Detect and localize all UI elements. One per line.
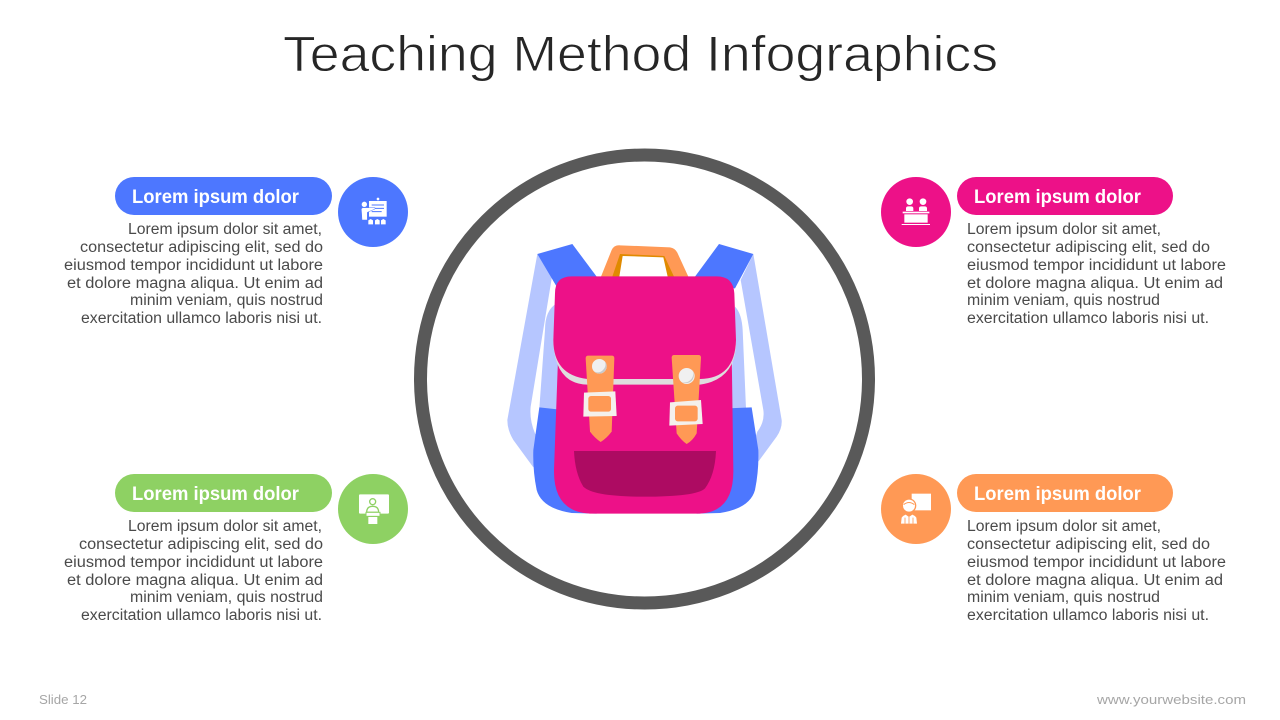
heading pill: pink: Lorem ipsum dolor bbox=[974, 186, 1141, 208]
body text: Lorem ipsum dolor sit amet, bbox=[128, 518, 322, 535]
heading pill: green bbox=[115, 474, 332, 512]
heading pill: pink bbox=[957, 177, 1173, 215]
heading pill: orange bbox=[957, 474, 1173, 512]
body text: et dolore magna aliqua. Ut enim ad bbox=[67, 275, 323, 292]
body text: eiusmod tempor incididunt ut labore bbox=[64, 257, 323, 274]
central ring bbox=[420, 155, 868, 603]
body text: Lorem ipsum dolor sit amet, bbox=[967, 518, 1161, 535]
icon: two people at desk bbox=[881, 177, 951, 247]
body text: exercitation ullamco laboris nisi ut. bbox=[967, 607, 1209, 624]
heading pill: green: Lorem ipsum dolor bbox=[132, 483, 299, 505]
body text: consectetur adipiscing elit, sed do bbox=[967, 239, 1210, 256]
body text bbox=[64, 518, 323, 624]
title: Teaching Method Infographics bbox=[283, 26, 998, 82]
body text: minim veniam, quis nostrud bbox=[130, 589, 323, 606]
body text: consectetur adipiscing elit, sed do bbox=[80, 239, 323, 256]
body text: Lorem ipsum dolor sit amet, bbox=[967, 221, 1161, 238]
panel: top right bbox=[881, 177, 1226, 327]
body text: eiusmod tempor incididunt ut labore bbox=[64, 554, 323, 571]
backpack illustration bbox=[507, 244, 782, 514]
body text: et dolore magna aliqua. Ut enim ad bbox=[67, 572, 323, 589]
panel: bottom right bbox=[881, 474, 1226, 624]
body text: exercitation ullamco laboris nisi ut. bbox=[81, 607, 322, 624]
body text bbox=[967, 221, 1226, 327]
body text: consectetur adipiscing elit, sed do bbox=[967, 536, 1210, 553]
body text bbox=[967, 518, 1226, 624]
body text: et dolore magna aliqua. Ut enim ad bbox=[967, 572, 1223, 589]
body text: Lorem ipsum dolor sit amet, bbox=[128, 221, 322, 238]
footer: website: www.yourwebsite.com bbox=[1096, 692, 1246, 707]
body text: et dolore magna aliqua. Ut enim ad bbox=[967, 275, 1223, 292]
body text: minim veniam, quis nostrud bbox=[130, 292, 323, 309]
body text: eiusmod tempor incididunt ut labore bbox=[967, 554, 1226, 571]
heading pill: blue: Lorem ipsum dolor bbox=[132, 186, 299, 208]
footer: slide number: Slide 12 bbox=[39, 692, 87, 707]
icon: speaker at podium bbox=[338, 474, 408, 544]
icon: teacher beside board bbox=[881, 474, 951, 544]
body text: exercitation ullamco laboris nisi ut. bbox=[81, 310, 322, 327]
body text: minim veniam, quis nostrud bbox=[967, 589, 1160, 606]
body text: consectetur adipiscing elit, sed do bbox=[79, 536, 323, 553]
panel: top left bbox=[64, 177, 408, 327]
heading pill: blue bbox=[115, 177, 332, 215]
body text: minim veniam, quis nostrud bbox=[967, 292, 1160, 309]
body text: eiusmod tempor incididunt ut labore bbox=[967, 257, 1226, 274]
body text bbox=[64, 221, 323, 327]
icon: teacher at presentation board bbox=[338, 177, 408, 247]
heading pill: orange: Lorem ipsum dolor bbox=[974, 483, 1141, 505]
body text: exercitation ullamco laboris nisi ut. bbox=[967, 310, 1209, 327]
panel: bottom left bbox=[64, 474, 408, 624]
